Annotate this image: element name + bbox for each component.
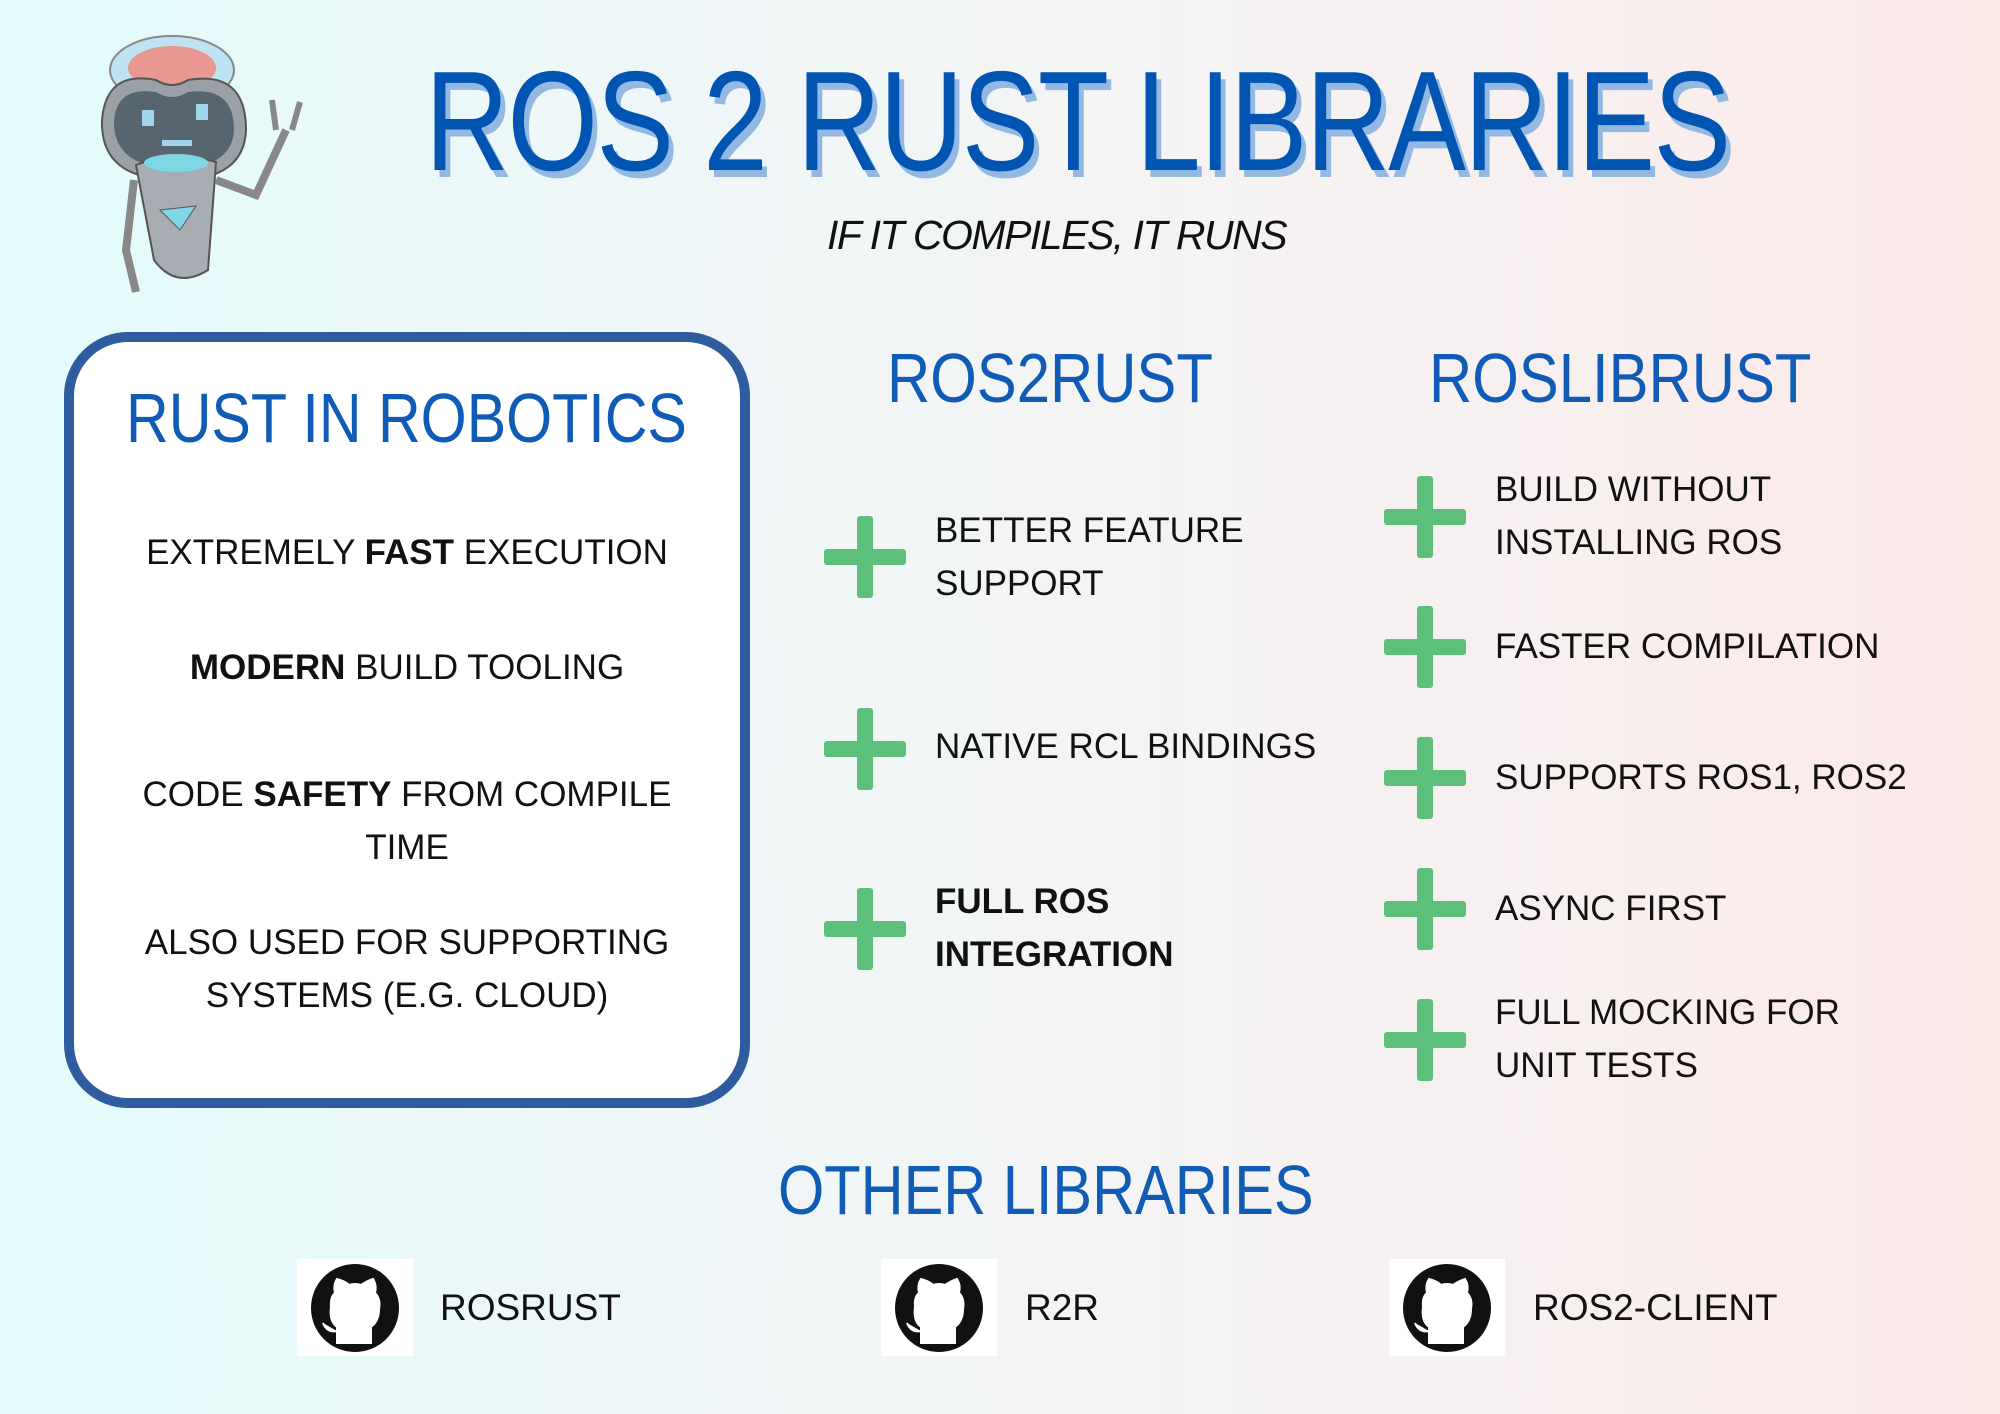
icon: plus d [1384, 868, 1466, 950]
text: feature [935, 511, 1244, 603]
label: ROS2-CLIENT [1533, 1287, 1778, 1328]
panel item: also used [144, 923, 669, 1015]
icon: plus a [1384, 476, 1466, 558]
icon: plus 1 [824, 516, 906, 598]
library: ros2-client [1389, 1259, 1778, 1356]
panel item: safety: TIME [365, 828, 449, 867]
text: build: INSTALLING ROS [1495, 523, 1782, 562]
icon: plus b [1384, 606, 1466, 688]
text: mocking: FULL MOCKING FOR [1495, 993, 1840, 1032]
library: r2r [881, 1259, 1099, 1356]
text: supports: SUPPORTS ROS1, ROS2 [1495, 758, 1907, 797]
panel item: also used: ALSO USED FOR SUPPORTING [145, 923, 669, 962]
text: mocking [1495, 993, 1840, 1085]
text: full ros: FULL ROS [935, 882, 1109, 921]
heading: other libraries: OTHER LIBRARIES [778, 1151, 1314, 1229]
panel item: fast: EXTREMELY FAST EXECUTION [146, 533, 668, 572]
panel item: safety [143, 775, 671, 867]
text: rcl: NATIVE RCL BINDINGS [935, 727, 1316, 766]
subtitle: IF IT COMPILES, IT RUNS [827, 212, 1286, 258]
panel item: also used: SYSTEMS (E.G. CLOUD) [206, 976, 608, 1015]
panel heading: RUST IN ROBOTICS [126, 379, 687, 457]
ros2rust items [824, 511, 1316, 974]
icon: plus 2 [824, 708, 906, 790]
icon: plus 3 [824, 888, 906, 970]
library: rosrust [297, 1259, 621, 1356]
label: ROSRUST [440, 1287, 621, 1328]
text: async: ASYNC FIRST [1495, 889, 1726, 928]
icon: github [1389, 1259, 1505, 1356]
icon: github [881, 1259, 997, 1356]
heading: roslibrust: ROSLIBRUST [1429, 339, 1811, 417]
text: feature: SUPPORT [935, 564, 1104, 603]
panel item: safety: CODE SAFETY FROM COMPILE [143, 775, 671, 814]
text: full ros [935, 882, 1174, 974]
label: R2R [1025, 1287, 1099, 1328]
text: faster: FASTER COMPILATION [1495, 627, 1879, 666]
icon: plus e [1384, 999, 1466, 1081]
text: full ros: INTEGRATION [935, 935, 1174, 974]
robot mascot [100, 35, 303, 293]
text: build: BUILD WITHOUT [1495, 470, 1771, 509]
panel item: modern: MODERN BUILD TOOLING [190, 648, 624, 687]
icon: plus c [1384, 737, 1466, 819]
roslibrust items [1384, 470, 1907, 1085]
title: ROS 2 RUST LIBRARIES [425, 42, 1730, 201]
text: build [1495, 470, 1782, 562]
icon: github [297, 1259, 413, 1356]
panel: rust in robotics [64, 332, 750, 1108]
text: feature: BETTER FEATURE [935, 511, 1244, 550]
heading: ros2rust: ROS2RUST [887, 339, 1213, 417]
text: mocking: UNIT TESTS [1495, 1046, 1698, 1085]
